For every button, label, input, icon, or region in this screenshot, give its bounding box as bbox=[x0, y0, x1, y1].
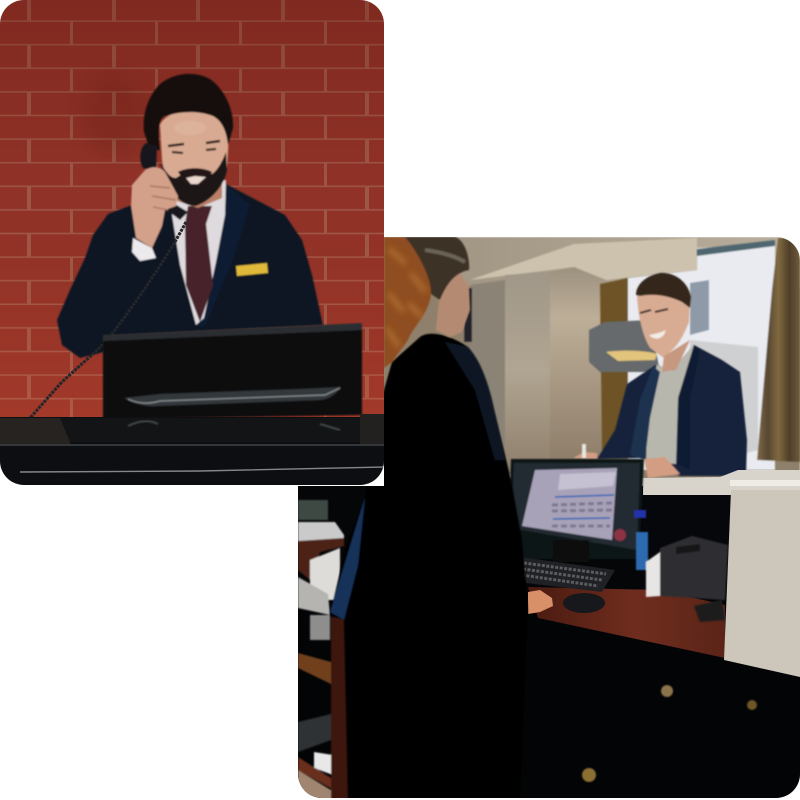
phone cord bbox=[30, 222, 186, 418]
lobby background bbox=[298, 237, 800, 800]
guest seen from behind bbox=[330, 237, 528, 800]
man behind the counter bbox=[573, 273, 747, 478]
white box column bbox=[724, 490, 800, 677]
guest curly hair bbox=[384, 237, 431, 368]
keyboard bbox=[520, 557, 615, 592]
panel: guest at check-in desk photo bbox=[298, 237, 800, 800]
drawer knobs bbox=[582, 685, 757, 782]
front counter bbox=[298, 470, 800, 590]
hands bbox=[644, 457, 680, 478]
eyes and brows bbox=[168, 141, 220, 146]
receipt printer and desk items bbox=[634, 510, 728, 622]
shirt cuff bbox=[132, 238, 156, 261]
shirt and collar bbox=[172, 180, 226, 325]
guest hand bbox=[528, 590, 553, 614]
window and curtains bbox=[600, 238, 800, 470]
reception desk top bbox=[0, 414, 384, 487]
left shelves with office equipment bbox=[298, 499, 348, 798]
hair bbox=[144, 74, 233, 150]
wooden desk surface bbox=[528, 587, 725, 658]
face bbox=[637, 291, 690, 358]
panel: receptionist on the phone photo bbox=[0, 0, 384, 487]
jacket bbox=[597, 345, 747, 476]
jacket bbox=[57, 184, 323, 358]
computer mouse bbox=[563, 593, 605, 613]
name badge bbox=[236, 263, 268, 276]
guest hair bun bbox=[402, 237, 469, 300]
hand bbox=[131, 167, 178, 248]
hair bbox=[636, 273, 691, 308]
brick wall background bbox=[0, 0, 384, 420]
tie bbox=[185, 206, 213, 322]
desk monitor back panel bbox=[103, 323, 362, 419]
neck bbox=[176, 184, 223, 209]
cabinet bbox=[298, 590, 800, 800]
face bbox=[158, 110, 230, 179]
pendant lamp bbox=[589, 320, 660, 372]
phone handset bbox=[140, 143, 157, 172]
guest neck and face bbox=[436, 268, 470, 337]
computer monitor bbox=[508, 459, 644, 562]
man in navy suit bbox=[57, 74, 323, 358]
beard bbox=[160, 152, 227, 206]
